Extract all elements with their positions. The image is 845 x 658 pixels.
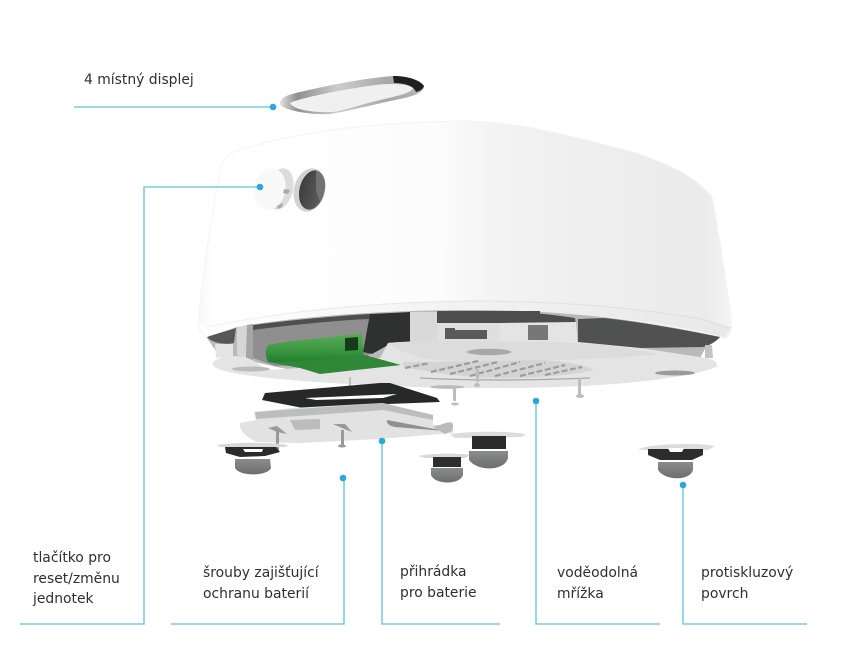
foot: far right — [638, 444, 715, 478]
callout: 4 místný displej: 4 místný displej — [84, 72, 194, 88]
callout: šrouby: ochranu baterií — [203, 586, 310, 602]
callout: tlačítko pro reset — [20, 184, 263, 624]
icon: display ring part — [280, 76, 424, 114]
callout: voděodolná mřížka: mřížka — [557, 586, 604, 602]
device: main white body — [198, 121, 732, 338]
callout: voděodolná mřížka — [533, 398, 660, 624]
device: open interior — [207, 310, 720, 372]
device: bottom plate — [213, 341, 717, 389]
icon: reset button — [250, 165, 298, 213]
foot: left — [217, 443, 288, 474]
callout: šrouby: šrouby zajišťující — [203, 565, 320, 581]
callout: přihrádka — [379, 438, 500, 624]
callout: tlačítko pro reset: reset/změnu — [33, 571, 120, 587]
callout: protiskluzový povrch: povrch — [701, 586, 748, 602]
gasket — [262, 383, 440, 408]
callout: přihrádka: přihrádka — [400, 564, 467, 580]
icon: green battery — [266, 333, 401, 374]
screws — [349, 369, 584, 406]
callout: protiskluzový povrch — [680, 482, 807, 624]
callout: přihrádka: pro baterie — [400, 585, 477, 601]
icon: window — [289, 165, 330, 215]
battery compartment — [240, 403, 453, 450]
callout: tlačítko pro reset: tlačítko pro — [33, 550, 111, 566]
callout: šrouby — [171, 475, 346, 624]
foot: right large — [450, 432, 526, 468]
foot: middle — [418, 454, 470, 482]
callout: protiskluzový povrch: protiskluzový — [701, 565, 793, 581]
callout: tlačítko pro reset: jednotek — [32, 591, 94, 607]
callout: voděodolná mřížka: voděodolná — [557, 565, 638, 581]
callout: 4 místný displej — [74, 72, 276, 110]
